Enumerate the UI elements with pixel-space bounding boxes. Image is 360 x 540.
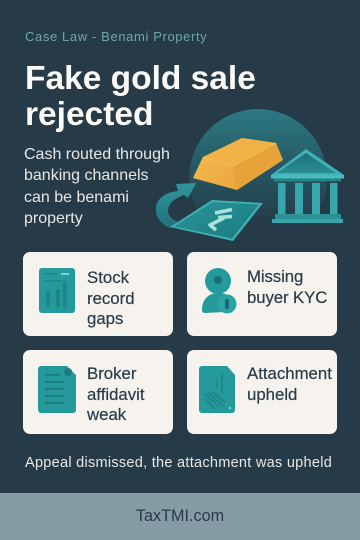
label — [246, 364, 332, 404]
rupee symbol — [210, 210, 232, 230]
label: gaps — [87, 309, 123, 328]
icon: document — [38, 366, 76, 413]
label: weak — [87, 405, 126, 424]
label: buyer KYC — [247, 288, 327, 306]
gold bar — [193, 138, 283, 190]
label: Broker — [87, 364, 136, 383]
panel: missing buyer KYC — [187, 252, 337, 336]
cash note with rupee — [170, 200, 263, 241]
label: Stock — [87, 268, 129, 287]
subtitle: Cash routed through — [24, 146, 170, 163]
label: record — [87, 288, 135, 308]
title — [25, 60, 256, 133]
label — [86, 364, 145, 424]
subtitle: can be benami — [24, 189, 129, 206]
halo circle — [189, 109, 327, 247]
icon: person with lock — [202, 268, 236, 314]
panel: attachment upheld — [187, 350, 337, 434]
label: Missing — [247, 267, 303, 286]
subtitle: banking channels — [24, 167, 149, 184]
subtitle: property — [24, 210, 83, 227]
bank building — [271, 149, 344, 223]
icon: stock ledger chart — [39, 268, 75, 313]
conclusion text: Appeal dismissed, the attachment was upheld — [25, 455, 332, 471]
curved arrow — [156, 183, 196, 228]
footer brand: TaxTMI.com — [136, 507, 224, 525]
title: Fake gold sale — [25, 60, 256, 97]
label: Attachment — [247, 364, 332, 383]
subtitle — [24, 146, 170, 227]
footer band — [0, 493, 360, 540]
label — [87, 268, 135, 328]
label — [247, 267, 327, 307]
eyebrow label: Case Law - Benami Property — [25, 29, 207, 44]
label: upheld — [247, 384, 297, 404]
icon: attachment document — [199, 366, 235, 413]
label: affidavit — [87, 384, 145, 404]
panel: stock record gaps — [23, 252, 173, 336]
panel: broker affidavit weak — [23, 350, 173, 434]
title: rejected — [25, 96, 154, 133]
